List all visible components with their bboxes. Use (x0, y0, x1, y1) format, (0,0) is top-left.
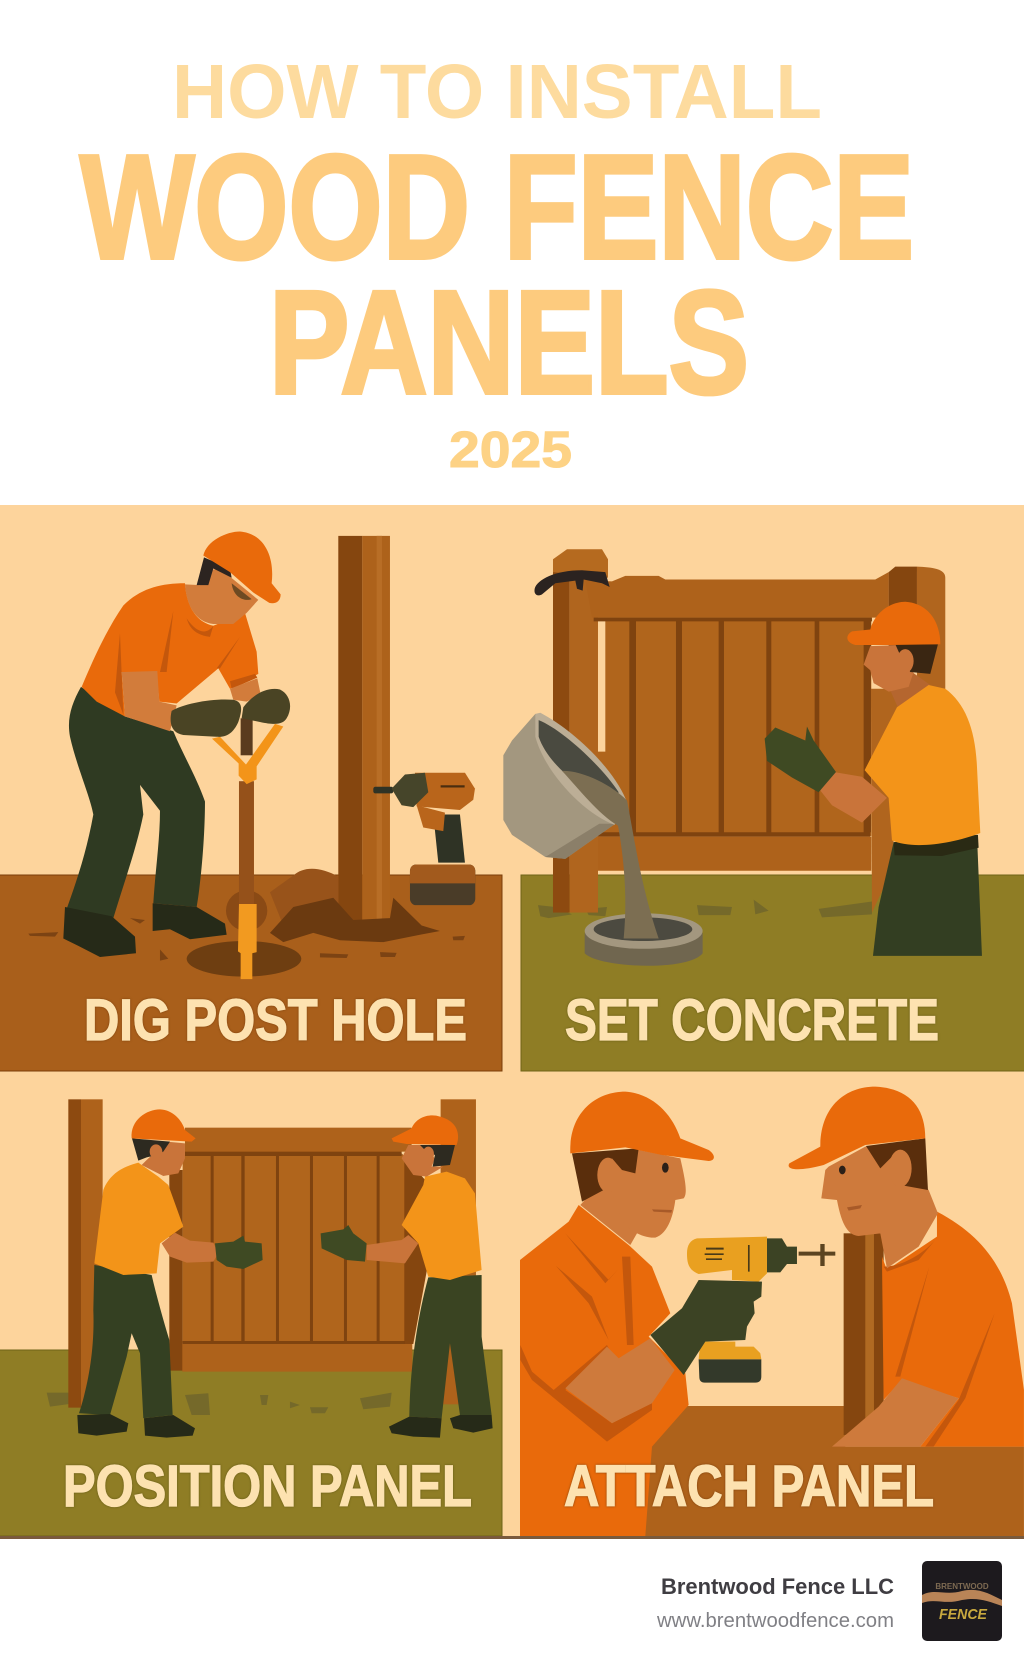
hammer (534, 570, 610, 595)
glove (215, 1236, 263, 1269)
belt (894, 835, 979, 856)
forearm (832, 1378, 959, 1447)
neck and face (185, 568, 258, 624)
cordless drill (373, 773, 475, 905)
frame (169, 1170, 183, 1371)
hard hat (847, 602, 940, 645)
title (80, 49, 914, 478)
worker (765, 602, 982, 956)
grass tufts (47, 1393, 392, 1415)
ground (521, 875, 1024, 1071)
panel: attach panel (520, 1087, 1024, 1536)
shirt (94, 1163, 183, 1275)
post (844, 1233, 884, 1435)
soil mound (28, 869, 465, 961)
board gaps (598, 620, 605, 752)
board gaps (183, 1151, 405, 1344)
arm (162, 1233, 218, 1263)
concrete base ring (585, 913, 703, 966)
pants (79, 1265, 173, 1418)
pants (873, 835, 982, 956)
post hole (187, 941, 301, 977)
top rail (185, 1128, 412, 1152)
shirt (865, 685, 980, 845)
drill bit (799, 1244, 835, 1266)
hard hat (789, 1087, 925, 1169)
illustration background (0, 505, 1024, 1537)
concrete bucket (503, 713, 626, 859)
shirt (882, 1212, 1024, 1447)
mouth (847, 1205, 862, 1211)
gloves (171, 689, 290, 737)
hard hat (203, 531, 281, 603)
left post (553, 549, 608, 913)
hair (420, 1145, 455, 1167)
wood fence (553, 549, 945, 913)
glove (765, 726, 836, 792)
footer: company name and url (656, 1574, 894, 1632)
hard hat (570, 1092, 714, 1161)
eye (839, 1166, 846, 1174)
pants (409, 1275, 492, 1418)
hair (895, 644, 938, 674)
shirt (82, 583, 258, 716)
shirt (402, 1172, 482, 1280)
grass tufts (538, 900, 872, 918)
drill chuck (767, 1238, 797, 1272)
panel: position panel (0, 1099, 502, 1536)
wood panel backdrop (644, 1406, 1024, 1536)
boots (389, 1415, 493, 1438)
face (864, 645, 914, 692)
ear (897, 649, 914, 673)
left post (68, 1099, 103, 1408)
pants (67, 687, 205, 918)
company name: Brentwood Fence LLC (661, 1574, 894, 1599)
right upright (871, 689, 902, 913)
scene: attaching the panel (520, 1087, 1024, 1536)
mouth (652, 1209, 672, 1213)
face (142, 1142, 185, 1176)
ear (597, 1158, 619, 1192)
title line: how to install: HOW TO INSTALL (172, 49, 822, 135)
panel: set concrete (503, 549, 1024, 1071)
right post (441, 1099, 476, 1404)
right worker (321, 1115, 493, 1438)
year: 2025 (449, 421, 572, 478)
drill vents (705, 1245, 750, 1272)
bottom stripe (0, 1536, 1024, 1539)
hair (197, 557, 232, 585)
shirt folds (115, 611, 257, 715)
shovel (212, 718, 283, 979)
dividers (594, 618, 872, 837)
top rail (585, 572, 889, 618)
fence panel (169, 1128, 427, 1372)
boots (77, 1414, 195, 1438)
forearm (565, 1338, 675, 1423)
panel: dig post hole (0, 531, 502, 1071)
scene: pouring concrete (503, 549, 982, 966)
neck (889, 672, 930, 709)
ear (889, 1150, 912, 1187)
yellow drill (650, 1237, 835, 1383)
ground (0, 875, 502, 1071)
label: dig post hole: DIG POST HOLE (84, 988, 467, 1053)
ear (423, 1147, 434, 1161)
label: set concrete: SET CONCRETE (565, 988, 939, 1053)
arms (122, 671, 261, 731)
scene: positioning the panel (47, 1099, 493, 1438)
bottom rail (598, 837, 871, 871)
post (338, 536, 390, 921)
logo top text: BRENTWOOD (935, 1582, 989, 1591)
hair (132, 1138, 170, 1161)
battery (699, 1342, 761, 1383)
poured concrete (562, 771, 659, 938)
logo swoosh (922, 1590, 1002, 1606)
neck (580, 1170, 637, 1245)
arm (367, 1235, 418, 1263)
glove (321, 1225, 367, 1262)
neck and face (821, 1147, 938, 1268)
label: attach panel: ATTACH PANEL (564, 1454, 934, 1519)
hard hat (132, 1109, 196, 1142)
sunglasses (232, 583, 252, 600)
ear (150, 1144, 162, 1159)
eye (662, 1163, 669, 1173)
worker (63, 531, 290, 957)
hard hat (392, 1115, 458, 1145)
drill body (687, 1237, 767, 1282)
label: position panel: POSITION PANEL (63, 1454, 472, 1519)
arm (820, 772, 887, 823)
logo text: FENCE (939, 1606, 988, 1623)
face (592, 1150, 686, 1238)
shirt sleeve shadow (520, 1233, 652, 1442)
ground (0, 1350, 502, 1536)
boards (183, 1155, 404, 1343)
right worker (789, 1087, 1024, 1447)
logo (922, 1561, 1002, 1641)
hair (572, 1148, 639, 1202)
left worker (520, 1092, 714, 1536)
shirt folds (884, 1237, 995, 1447)
title line: panels: PANELS (269, 261, 749, 425)
left worker (77, 1109, 263, 1438)
boots (63, 903, 227, 957)
hair (866, 1138, 928, 1190)
scene: digging (28, 531, 475, 979)
shirt (520, 1205, 689, 1536)
face (402, 1145, 443, 1177)
bottom rail (182, 1344, 412, 1372)
right post (889, 567, 945, 692)
website: www.brentwoodfence.com (656, 1609, 894, 1632)
fence boards (598, 618, 871, 836)
glove (650, 1280, 762, 1375)
